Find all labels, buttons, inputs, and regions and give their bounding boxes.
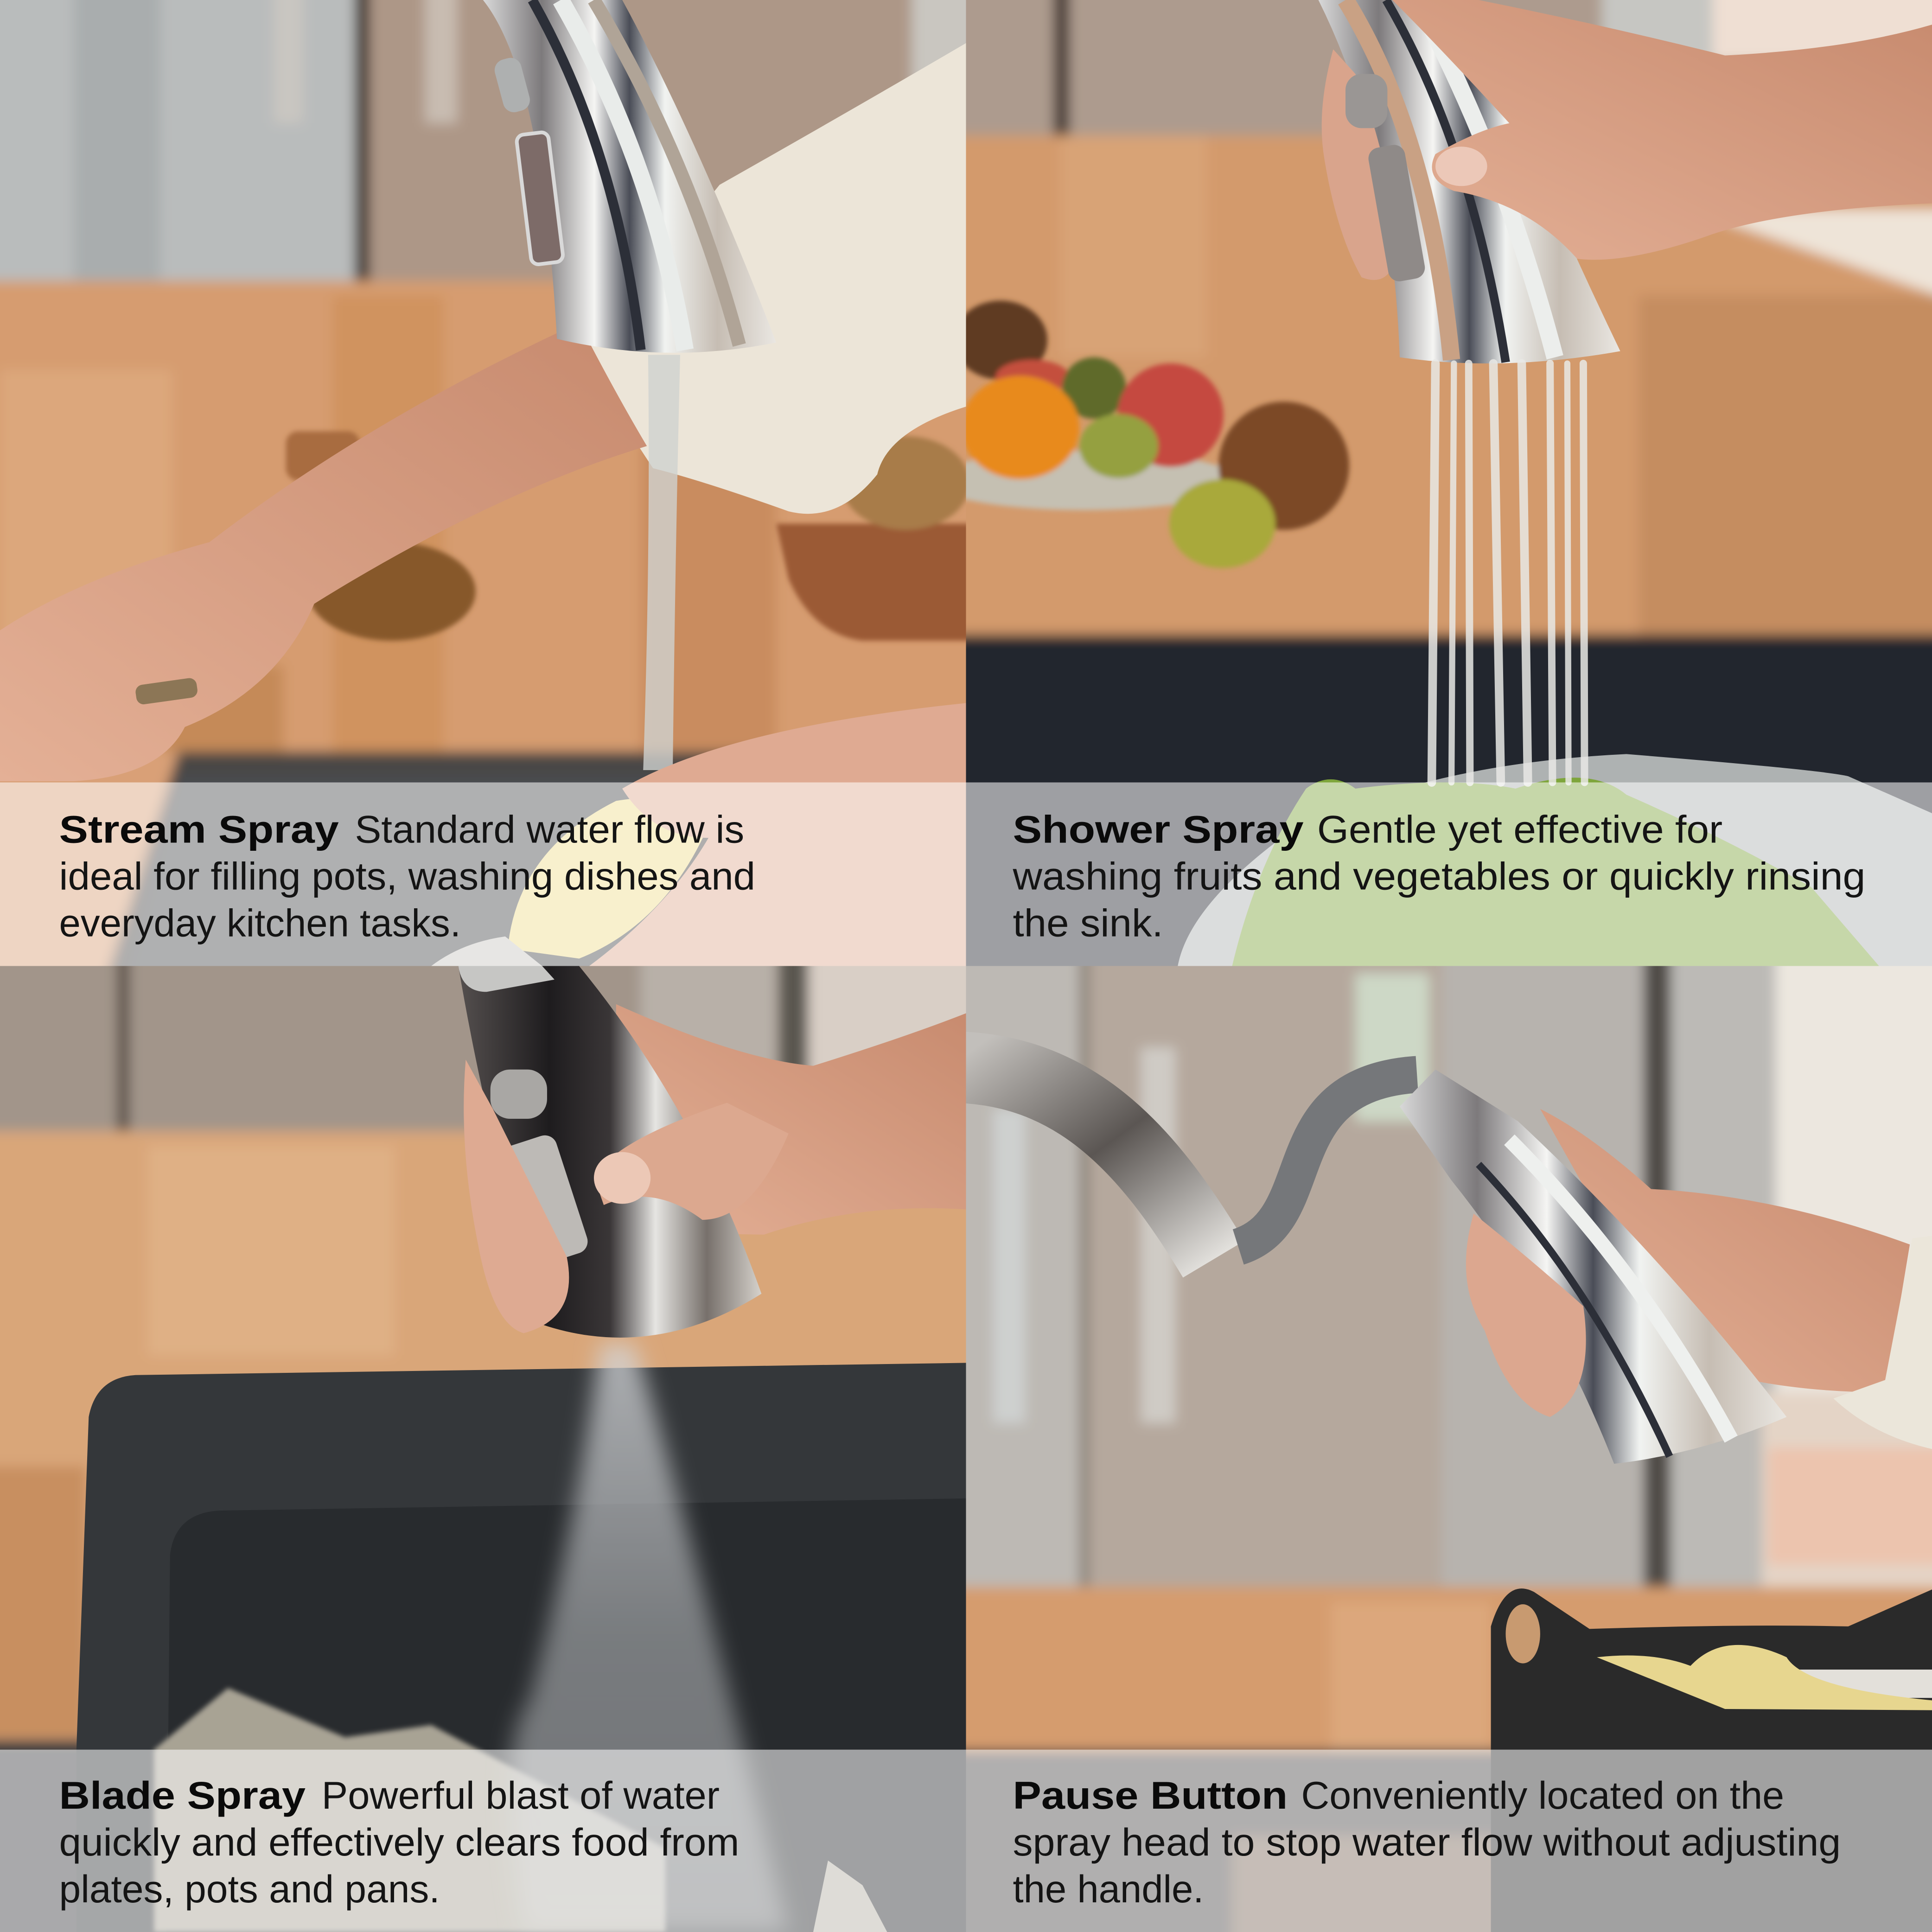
panel: shower spray — [930, 0, 1932, 998]
panel: stream spray — [0, 0, 991, 998]
panel: blade spray — [0, 941, 991, 1932]
water stream — [643, 355, 680, 770]
flexible hose — [1238, 1074, 1417, 1247]
caption: shower spray — [966, 783, 1932, 966]
arm and hand over the spray head — [1392, 0, 1932, 260]
chrome faucet head — [459, 966, 761, 1338]
caption: stream spray: everyday kitchen tasks. — [59, 901, 461, 945]
panel: pause button — [941, 941, 1932, 1932]
photo background: counter and sink — [0, 941, 991, 1932]
caption: pause button — [966, 1750, 1932, 1932]
food residue on plate — [154, 1688, 665, 1932]
photo background: kitchen counter — [0, 0, 991, 998]
fingers and buttons — [1322, 49, 1427, 283]
lettuce — [1232, 778, 1879, 966]
caption: shower spray: Shower Spray — [1013, 808, 1304, 851]
caption: pause button: spray head to stop water flow without adjusting — [1013, 1820, 1841, 1864]
chrome spray head — [1400, 1070, 1786, 1464]
cooking pot with potatoes — [1491, 1588, 1932, 1932]
thumb nail — [1435, 147, 1487, 186]
caption: stream spray: Standard water flow is — [355, 808, 744, 851]
lower hand — [579, 702, 973, 973]
fingers — [1466, 1214, 1586, 1417]
sink basin — [77, 1363, 973, 1932]
caption: blade spray: Powerful blast of water — [322, 1773, 720, 1817]
hand behind spray head — [1540, 1109, 1910, 1392]
photo background: fridge and counter — [941, 941, 1932, 1932]
photo background: counter and sink — [941, 0, 1932, 998]
caption: shower spray: the sink. — [1013, 901, 1163, 945]
arm and hand behind head — [616, 1004, 973, 1235]
spray head handle detail in hand — [134, 677, 198, 705]
potato — [508, 798, 708, 959]
caption: pause button: Conveniently located on the — [1301, 1773, 1784, 1817]
chrome spout — [949, 1067, 1214, 1259]
caption: shower spray: washing fruits and vegetables or quickly rinsing — [1012, 854, 1865, 898]
caption: blade spray: Blade Spray — [59, 1773, 306, 1817]
caption: shower spray: Gentle yet effective for — [1317, 808, 1722, 851]
wooden bowl and cutting board — [286, 431, 986, 641]
forearm and hand — [0, 323, 647, 781]
caption: pause button: the handle. — [1013, 1867, 1204, 1911]
fingers and thumb — [464, 1059, 789, 1333]
caption: stream spray: Stream Spray — [59, 808, 339, 851]
fruit plate — [930, 300, 1349, 568]
chrome faucet head — [483, 0, 776, 353]
chrome faucet head — [1319, 0, 1620, 363]
caption: blade spray: quickly and effectively clears food from — [59, 1820, 740, 1864]
shirt cuff — [1833, 1236, 1932, 1449]
caption: blade spray: plates, pots and pans. — [59, 1867, 440, 1911]
caption: blade spray — [0, 1750, 966, 1932]
bowl — [1177, 754, 1932, 973]
metal bowl edge — [431, 937, 542, 966]
water streams — [1432, 363, 1585, 783]
caption: stream spray: ideal for filling pots, washing dishes and — [59, 854, 755, 898]
caption: stream spray — [0, 783, 966, 966]
sleeve — [585, 43, 966, 514]
caption: pause button: Pause Button — [1013, 1773, 1288, 1817]
water mist — [510, 1343, 789, 1932]
